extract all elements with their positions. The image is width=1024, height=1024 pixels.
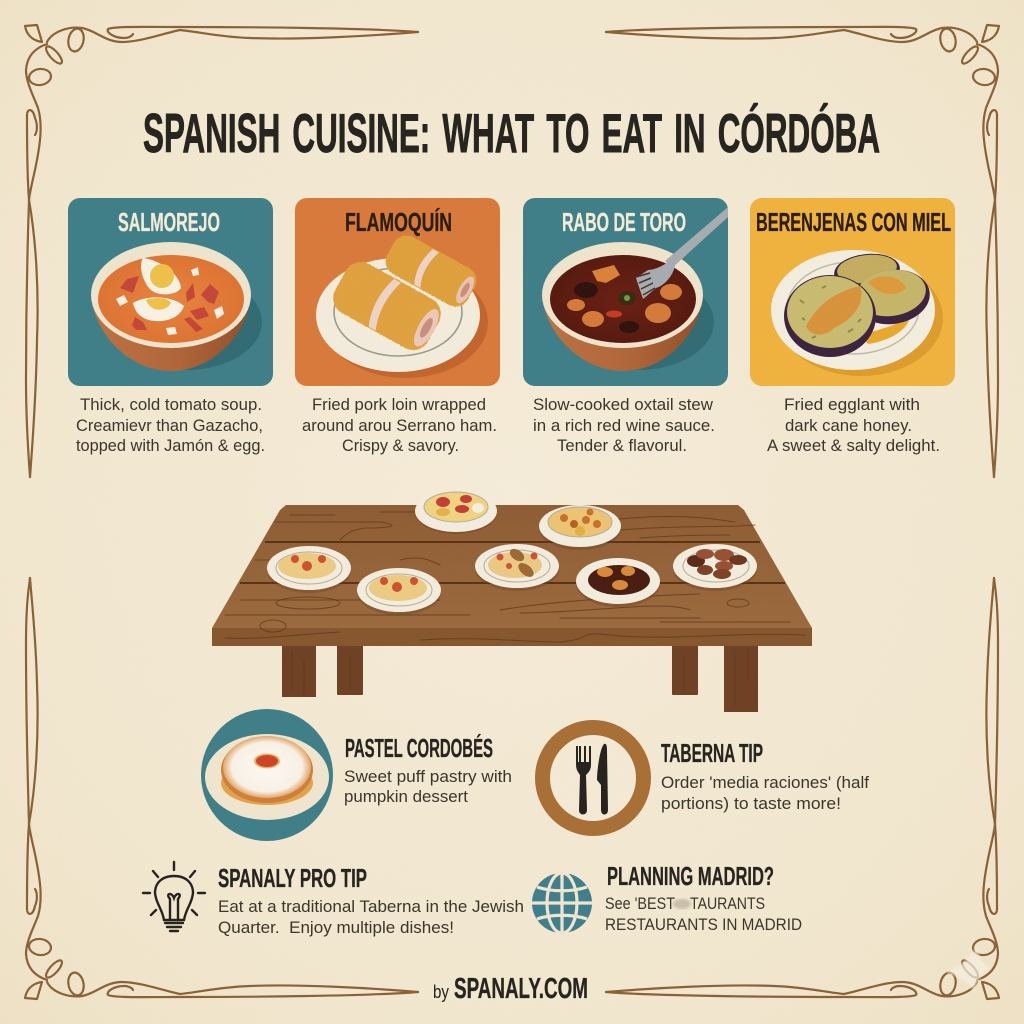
illustration: wooden table with tapas bbox=[212, 490, 812, 712]
illustration: oxtail stew bowl bbox=[542, 242, 714, 371]
heading: TABERNA TIP bbox=[661, 738, 763, 768]
description: in a rich red wine sauce. bbox=[533, 416, 715, 435]
plate 2 bbox=[539, 505, 621, 550]
description: topped with Jamón & egg. bbox=[76, 436, 265, 455]
table top bbox=[212, 505, 812, 646]
icon: fork bbox=[636, 207, 728, 299]
card background bbox=[295, 198, 500, 386]
description: Quarter. Enjoy multiple dishes! bbox=[218, 918, 454, 937]
description: TAURANTS bbox=[690, 894, 765, 913]
description: Crispy & savory. bbox=[342, 436, 459, 455]
heading: SPANALY PRO TIP bbox=[218, 863, 367, 893]
description bbox=[767, 395, 940, 455]
section: planning madrid bbox=[532, 861, 802, 934]
description: RESTAURANTS IN MADRID bbox=[605, 915, 802, 934]
footer credit: by bbox=[433, 982, 449, 1002]
panel: flamoquín bbox=[295, 198, 500, 455]
description: Eat at a traditional Taberna in the Jewish bbox=[218, 897, 524, 916]
ornamental border: bottom right corner bbox=[606, 578, 999, 999]
description: dark cane honey. bbox=[785, 416, 912, 435]
icon: fork and knife in ring bbox=[542, 728, 644, 828]
icon: light bulb bbox=[143, 862, 205, 931]
ornamental border: bottom left corner bbox=[25, 578, 418, 999]
heading: PLANNING MADRID? bbox=[607, 861, 774, 891]
description: Fried egglant with bbox=[784, 395, 920, 414]
plate 6 bbox=[576, 558, 660, 607]
description bbox=[344, 767, 512, 806]
description bbox=[76, 395, 265, 455]
plate 5 bbox=[475, 544, 559, 591]
footer credit: SPANALY.COM bbox=[454, 973, 588, 1005]
card heading: FLAMOQUÍN bbox=[345, 207, 452, 237]
description: Creamievr than Gazacho, bbox=[76, 416, 263, 435]
description: Slow-cooked oxtail stew bbox=[533, 395, 714, 414]
plate 3 bbox=[267, 546, 351, 593]
section: taberna tip bbox=[542, 728, 869, 828]
section: pastel cordobés bbox=[201, 709, 512, 841]
illustration: pastry on plate in teal circle bbox=[201, 709, 333, 841]
illustration: salmorejo bowl bbox=[91, 242, 262, 371]
description bbox=[533, 395, 715, 455]
panel: berenjenas con miel bbox=[750, 198, 955, 455]
description: Thick, cold tomato soup. bbox=[80, 395, 262, 414]
card background bbox=[750, 198, 955, 386]
panel: rabo de toro bbox=[523, 198, 728, 455]
footer credit bbox=[433, 973, 588, 1005]
plate 7 bbox=[673, 544, 757, 591]
card background bbox=[523, 198, 728, 386]
description: See 'BEST bbox=[605, 894, 675, 913]
description: Sweet puff pastry with bbox=[344, 767, 512, 786]
card heading: RABO DE TORO bbox=[562, 207, 686, 237]
illustration: fried eggplant on plate bbox=[771, 250, 943, 376]
card background bbox=[68, 198, 273, 386]
description: A sweet & salty delight. bbox=[767, 436, 940, 455]
illustration: flamenquín rolls on plate bbox=[316, 230, 488, 378]
description: around arou Serrano ham. bbox=[302, 416, 497, 435]
description bbox=[661, 773, 869, 813]
description: portions) to taste more! bbox=[661, 794, 841, 813]
ornamental border: top left corner bbox=[25, 25, 418, 477]
card heading: SALMOREJO bbox=[118, 207, 220, 237]
watermark sparkle bbox=[945, 945, 990, 992]
ornamental border: top right corner bbox=[606, 25, 999, 477]
description bbox=[605, 894, 802, 934]
description bbox=[218, 897, 524, 937]
description: Tender & flavorul. bbox=[557, 436, 687, 455]
description bbox=[302, 395, 497, 455]
plate 1 bbox=[415, 490, 497, 534]
heading: PASTEL CORDOBÉS bbox=[345, 733, 493, 763]
table legs bbox=[282, 640, 758, 712]
icon: globe bbox=[532, 873, 592, 933]
plate 4 bbox=[357, 568, 441, 615]
description: Order 'media raciones' (half bbox=[661, 773, 869, 792]
description: pumpkin dessert bbox=[344, 787, 468, 806]
panel: salmorejo bbox=[68, 198, 273, 455]
section: spanaly pro tip bbox=[143, 862, 524, 937]
description: Fried pork loin wrapped bbox=[312, 395, 486, 414]
